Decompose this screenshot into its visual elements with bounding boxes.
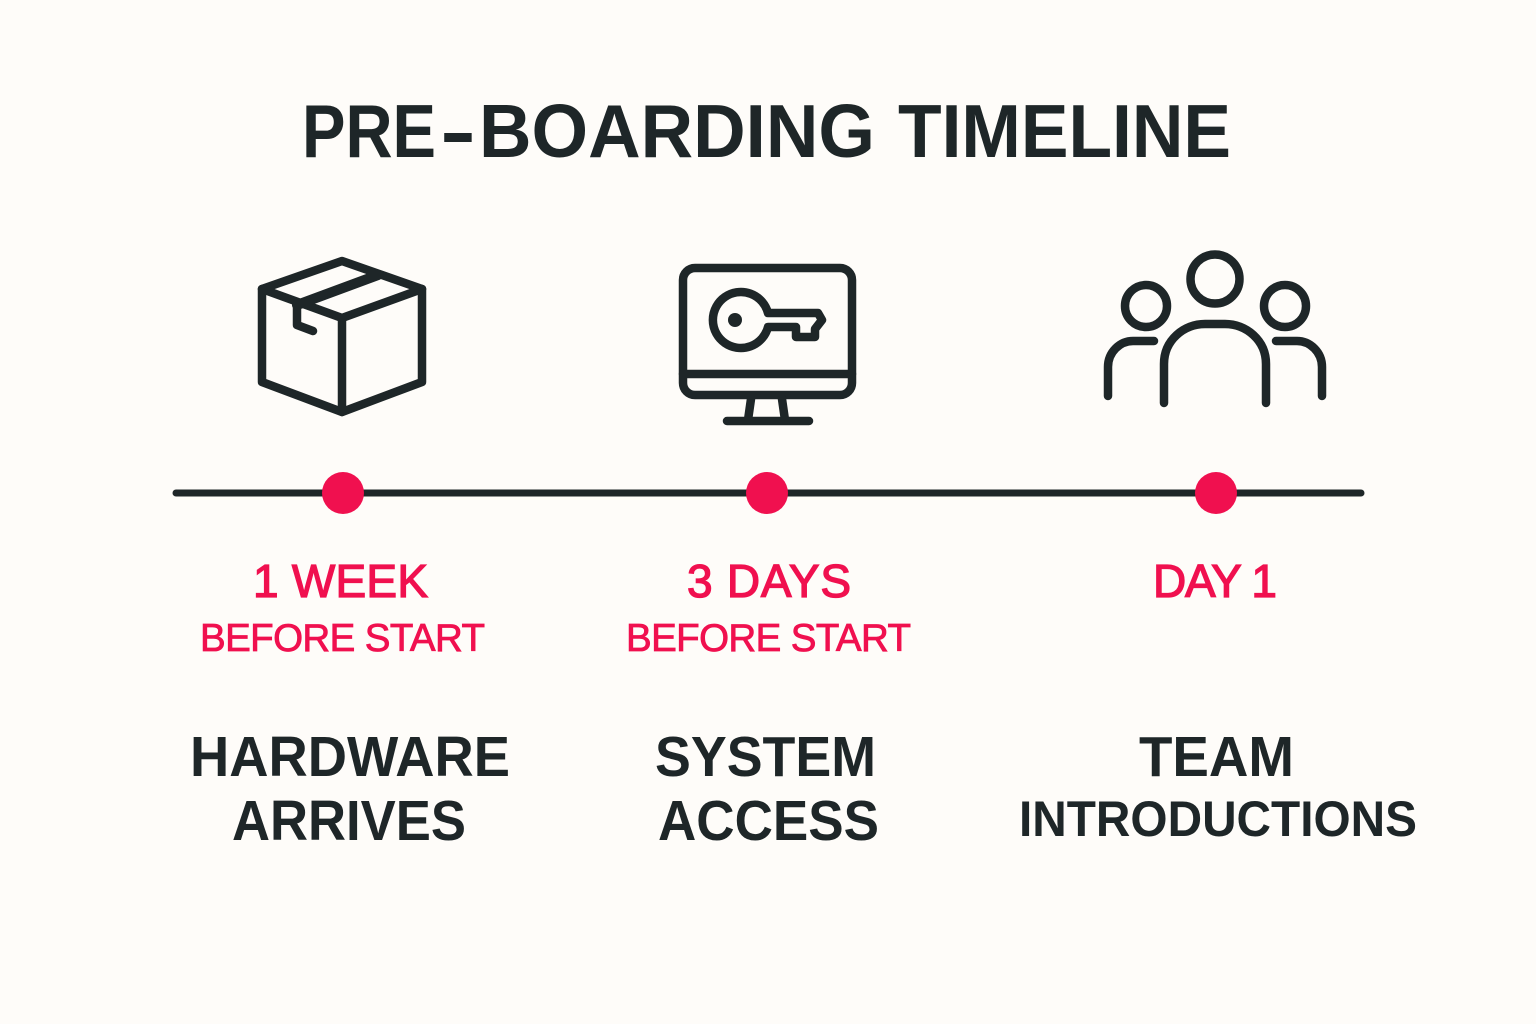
- milestone 2 date: BEFORE START: [626, 617, 911, 660]
- title: TIMELINE: [898, 89, 1231, 173]
- milestone 1 date: BEFORE START: [200, 617, 485, 660]
- milestone 3 label: INTRODUCTIONS: [1019, 791, 1417, 847]
- milestone 1 label: [190, 725, 510, 853]
- icon: monitor with key: [683, 268, 852, 421]
- timeline marker: 3 days: [746, 472, 788, 514]
- milestone 1 date: 1 WEEK: [253, 555, 428, 607]
- icon: cardboard box: [262, 261, 422, 412]
- milestone 2 label: [655, 725, 879, 853]
- milestone 2 label: ACCESS: [658, 789, 879, 853]
- title: PRE: [302, 89, 436, 173]
- icon: team of three people: [1108, 254, 1322, 403]
- title: -: [440, 89, 476, 173]
- milestone 1 label: ARRIVES: [232, 789, 466, 853]
- title: BOARDING: [479, 89, 875, 173]
- milestone 3 date: DAY 1: [1153, 555, 1277, 607]
- milestone 2 date: [626, 555, 911, 660]
- milestone 2 label: SYSTEM: [655, 725, 876, 789]
- milestone 1 date: [200, 555, 485, 660]
- timeline marker: day 1: [1195, 472, 1237, 514]
- milestone 1 label: HARDWARE: [190, 725, 510, 789]
- timeline line: [176, 490, 1361, 496]
- milestone 3 label: [1019, 725, 1417, 847]
- milestone 2 date: 3 DAYS: [687, 555, 851, 607]
- timeline marker: 1 week: [322, 472, 364, 514]
- milestone 3 label: TEAM: [1139, 725, 1294, 789]
